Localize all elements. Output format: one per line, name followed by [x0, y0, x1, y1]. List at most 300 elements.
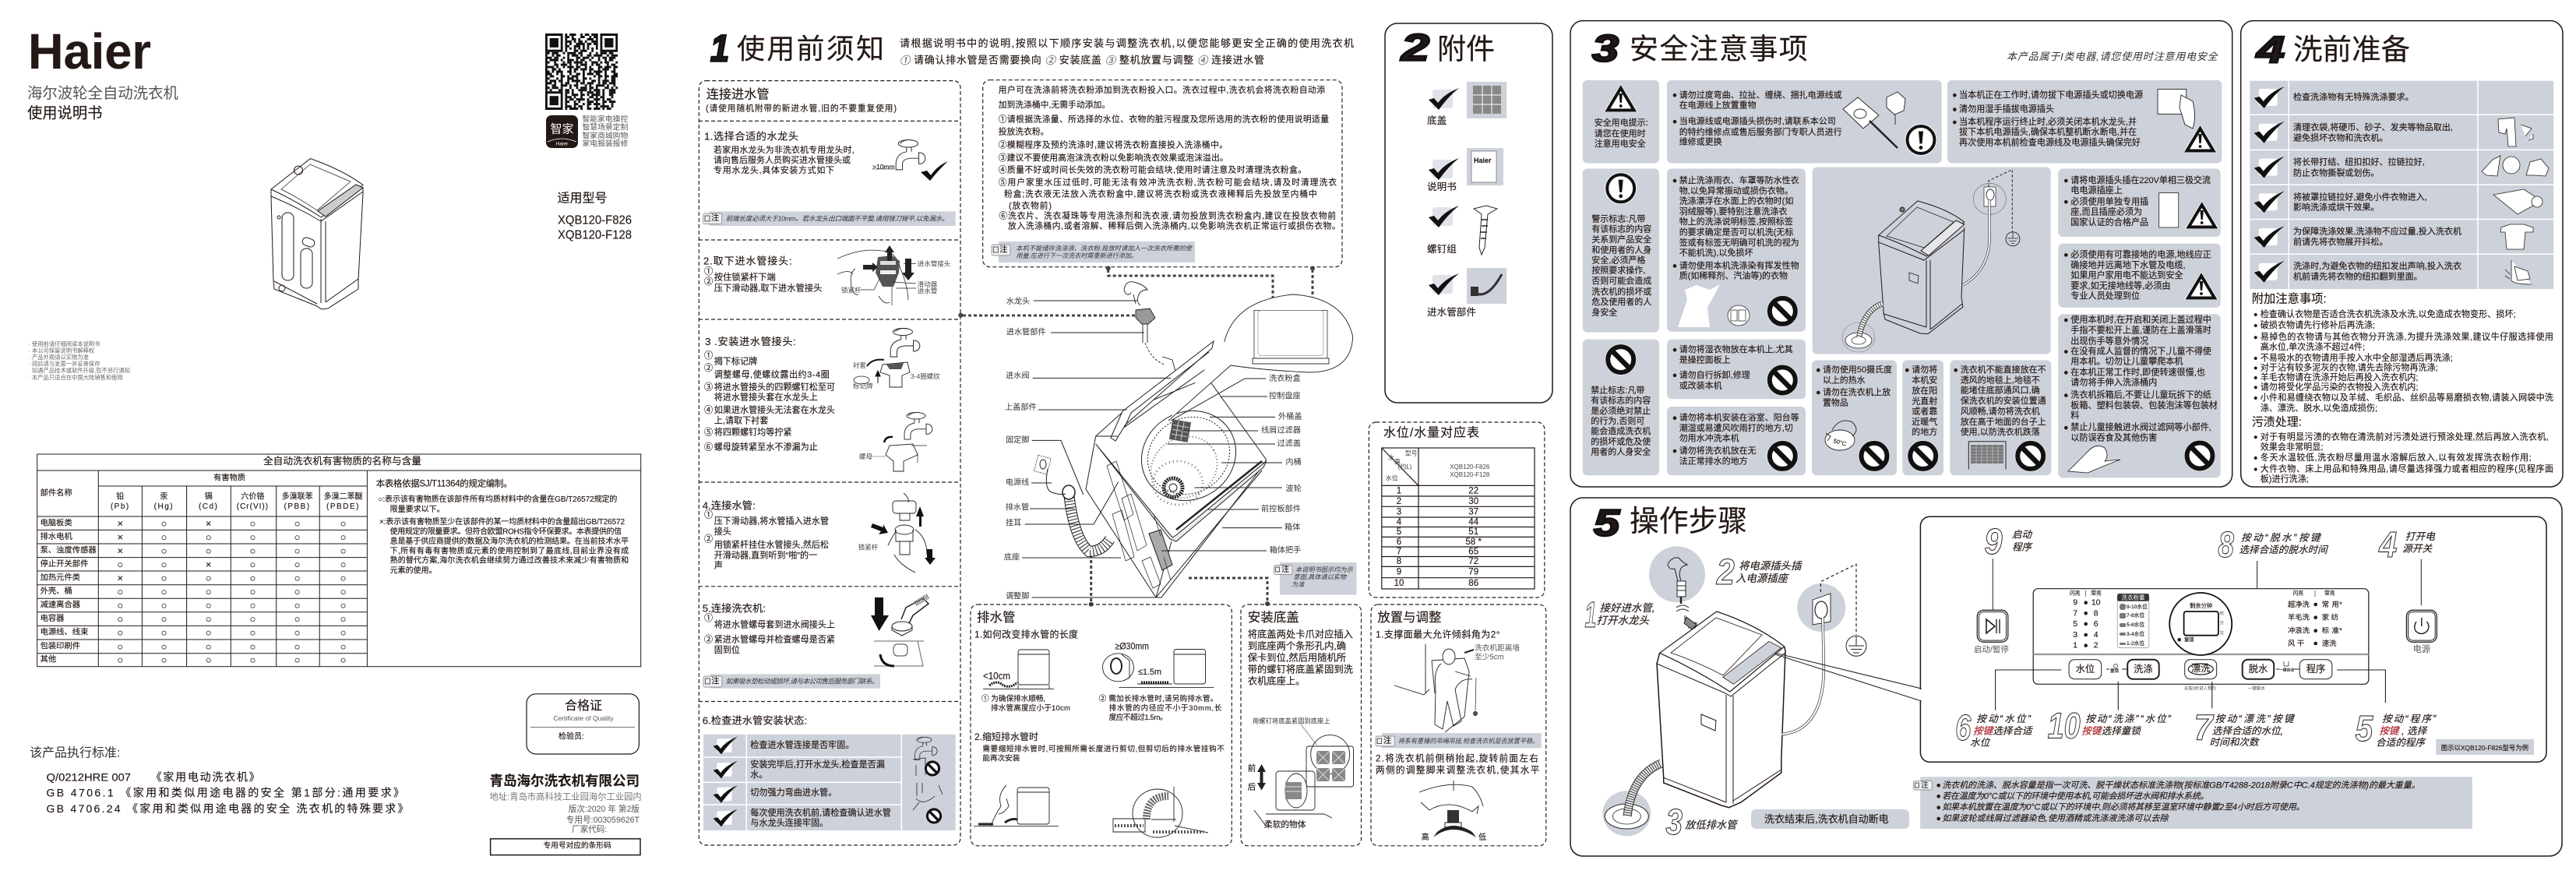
- part callouts: 波轮: [1285, 483, 1302, 494]
- heading: 连接进水管: [707, 87, 770, 101]
- hazardous substances table: ○: [294, 640, 301, 653]
- hazardous substances table: ○: [160, 654, 167, 665]
- QR code: [545, 33, 618, 110]
- card: socket requirements: 必须使用单独专用插: [2070, 196, 2148, 206]
- product standards: 《家用电动洗衣机》: [151, 771, 260, 784]
- additional notes: 小件和易缠绕衣物以及羊绒、毛织品、丝织品等易磨损衣物,请装入网袋中洗: [2261, 392, 2553, 403]
- app icon: [546, 115, 578, 148]
- text: hose shortening: 需要缩短排水管时,可按照所需长度进行剪切,但剪切后的排水管挂钩不: [982, 745, 1225, 754]
- checklist table: [703, 735, 956, 830]
- step 1 label: 接好进水管,: [1600, 602, 1654, 614]
- company info: 青岛海尔洗衣机有限公司: [489, 774, 640, 789]
- card: wet clothing: [1667, 340, 1806, 399]
- app icon: Haier: [556, 142, 569, 146]
- step 5 text: 固到位: [714, 644, 740, 655]
- step 5 label: 按动“程序”: [2382, 714, 2437, 724]
- hazardous substances table: ○: [249, 586, 255, 597]
- checklist text: 机前请先将衣物的纽扣翻到里面。: [2293, 270, 2423, 281]
- program indicators: [2288, 589, 2342, 647]
- card: power cord: [1667, 80, 1942, 164]
- hazardous substances table: (Cr(VI)): [237, 502, 269, 511]
- step 1 text: 请向售后服务人员购买进水管接头或: [714, 154, 851, 165]
- additional notes: 请勿将受化学品污染的衣物投入洗衣机内;: [2261, 381, 2418, 392]
- hazardous substances table: ○: [160, 600, 167, 611]
- app features: 智家商城购物: [583, 131, 628, 140]
- usage notes: · 如遇产品技术或软件升级,恕不另行通知: [28, 367, 130, 374]
- table values: [1394, 486, 1482, 588]
- text: hose extension: ② 需加长排水管时,请另购排水管。: [1099, 694, 1218, 703]
- additional notes: 涤、漂洗、脱水,以免造成损伤;: [2261, 403, 2377, 414]
- card: carpet ventilation: 透风的地毯上,地毯不: [1961, 374, 2040, 385]
- part callouts: 前控板部件: [1261, 503, 1301, 514]
- card: plug safety: 当本机程序运行终止时,必须关闭本机水龙头,并: [1959, 116, 2137, 127]
- icon: number 3: 3: [1592, 28, 1619, 70]
- card: carpet ventilation: 风顺畅,请勿将洗衣机: [1961, 406, 2040, 417]
- note: diagram: 注: [1281, 564, 1289, 574]
- note 1: 注: [711, 213, 719, 223]
- hazardous substances table: ○: [340, 600, 346, 611]
- card: sunlight: 或者靠: [1912, 406, 1937, 417]
- step 6 label: 6: [1955, 707, 1972, 748]
- hazardous substances table: 多溴联苯: [282, 491, 313, 501]
- company info: [489, 774, 642, 855]
- illustration: adjustable foot: [1419, 781, 1486, 842]
- usage notes: · 本产品只适合在中国大陆销售和使用: [28, 374, 123, 381]
- step 3 text: ④: [704, 406, 713, 415]
- illustration: tightening nut: [859, 412, 932, 471]
- checklist text: 切勿强力弯曲进水管。: [750, 787, 837, 798]
- model example tag: 图示以XQB120-F826型号为例: [2441, 744, 2528, 752]
- card: hot water: 置物品: [1823, 396, 1848, 407]
- card: child safety: 使用本机时,在开启和关闭上盖过程中: [2070, 314, 2211, 325]
- card: electrical safety hint: [1583, 80, 1659, 164]
- title: accessories: 附件: [1437, 33, 1495, 65]
- drain: [1842, 304, 1883, 352]
- panel: install base cover: 安装底盖: [1248, 610, 1299, 625]
- hazardous substances table: ○: [206, 586, 212, 597]
- control buttons: 水位: [2076, 663, 2095, 675]
- hazardous substances table: 镉: [205, 491, 213, 501]
- card: grounding: [2058, 244, 2221, 308]
- detergent text: 放入洗涤桶内,或者溶解、稀释后倒入洗涤桶内,以免影响洗衣机正常运行或损伤衣物。: [1008, 220, 1341, 231]
- hazardous substances table: 加热元件类: [41, 572, 80, 583]
- card: installation location: [1667, 407, 1806, 475]
- card: plug safety: 当本机正在工作时,请勿拔下电源插头或切换电源: [1959, 89, 2143, 100]
- hazardous substances table: ○: [340, 613, 346, 625]
- step 2 text: ②: [704, 277, 713, 287]
- table header: 水位: [1386, 474, 1398, 481]
- card: child safety: 出现伤手等意外情况: [2070, 335, 2148, 346]
- app icon: 智家: [550, 122, 573, 136]
- stain treatment: 效果会非常明显;: [2261, 441, 2323, 452]
- table values: 86: [1468, 579, 1478, 588]
- program indicators: 常亮: [2324, 589, 2335, 597]
- checklist text: [2293, 91, 2461, 281]
- hazardous substances table: ○: [294, 572, 301, 584]
- step 1 label: 1: [1584, 594, 1597, 635]
- card: plug safety: 拔下本机电源插头,确保本机整机断水断电,并在: [1959, 126, 2137, 137]
- text: hose shortening: 能再次安装: [982, 754, 1020, 763]
- hazardous substances table: 本表格依据SJ/T11364的规定编制。: [376, 478, 513, 489]
- applicable models: XQB120-F128: [558, 229, 632, 241]
- text: hose height: [981, 694, 1070, 713]
- hazardous substances table: ○: [206, 640, 212, 653]
- hazardous substances table: ○: [160, 626, 167, 639]
- water level indicators: 3: [2073, 630, 2077, 640]
- hazardous substances table: 息是基于供应商提供的数据及海尔洗衣机的检测结果。在当前技术水平: [390, 536, 629, 546]
- part callouts: 挂耳: [1006, 517, 1021, 528]
- section 3: safety precautions: [1570, 21, 2232, 487]
- card: wet clothing: 或改装本机: [1679, 380, 1722, 391]
- panel: control panel steps: [1920, 516, 2546, 762]
- step 3 text: ①: [704, 351, 713, 361]
- control buttons: 长按3秒进入预约: [2184, 685, 2216, 691]
- table header: 量: [1394, 458, 1401, 466]
- step 7 label: [2194, 707, 2296, 748]
- stain treatment: 冬天水温较低,洗衣粉尽量用温水溶解后放入,以有效发挥洗衣粉作用;: [2261, 452, 2532, 463]
- hazardous substances table: 汞: [160, 492, 167, 501]
- table header: 水: [1388, 453, 1394, 461]
- checklist text: 前请先将衣物展开抖松。: [2293, 236, 2388, 247]
- levelling text: 两侧的调整脚来调整洗衣机,使其水平: [1376, 765, 1540, 776]
- program indicators: 速洗: [2322, 639, 2337, 647]
- app features: 家电报装报修: [583, 139, 628, 148]
- step 3 text: 上,请取下衬套: [714, 415, 768, 425]
- step 8 label: [2218, 524, 2328, 652]
- step 4 text: ①: [704, 509, 713, 520]
- heading: (请使用随机附带的新进水管,旧的不要重复使用): [706, 103, 897, 113]
- card: child safety: [2058, 314, 2221, 478]
- labels: connector parts: 锁紧杆: [841, 287, 862, 294]
- hazardous substances table: ○: [206, 654, 212, 665]
- product standards: 该产品执行标准:: [30, 745, 120, 759]
- detergent text: 加到洗涤桶中,无需手动添加。: [999, 99, 1110, 110]
- panel: water level table: 水位/水量对应表: [1383, 425, 1479, 439]
- panel: water level table: [1369, 422, 1545, 597]
- step 4 text: [703, 499, 829, 570]
- company info: 版次:2020 年 第2版: [569, 804, 640, 814]
- checklist text: 防止衣物撕裂或划伤。: [2293, 167, 2379, 178]
- illustration: base cover: 柔软的物体: [1264, 819, 1306, 830]
- table values: 79: [1468, 567, 1478, 576]
- hazardous substances table: (Pb): [111, 502, 130, 511]
- panel: drain hose: <10cm: [983, 670, 1010, 682]
- hazardous substances table: ○: [117, 626, 123, 639]
- additional notes: 破损衣物请先行修补后再洗涤;: [2261, 319, 2375, 330]
- card: sunlight: 请勿将: [1912, 365, 1937, 375]
- table values: 72: [1468, 557, 1478, 566]
- levelling text: [1376, 752, 1540, 776]
- app features: 智慧场景定制: [583, 122, 628, 132]
- detergent text: 粉盒;洗衣液无法放入洗衣粉盒中,建议将洗衣粉或洗衣液稀释后先投放至内桶中: [1004, 189, 1317, 199]
- step 2 text: [703, 256, 822, 293]
- step 5 text: 紧进水管螺母并检查螺母是否紧: [714, 634, 835, 645]
- stain treatment: 污渍处理:: [2252, 416, 2302, 428]
- checklist text: 水。: [750, 770, 768, 780]
- text: hose height: ① 为确保排水顺畅,: [981, 694, 1045, 703]
- hazardous substances table: ○:表示该有害物质在该部件所有均质材料中的含量在GB/T26572规定的: [378, 494, 617, 504]
- step 3 text: 如果进水管接头无法套在水龙头: [714, 404, 835, 415]
- text: hose height: 排水管高度应小于10cm: [991, 703, 1070, 713]
- step 5 label: 合适的程序: [2376, 737, 2426, 748]
- hazardous substances table: 下,所有有毒有害物质或元素的使用控制到了最底线,目前业界没有成: [390, 545, 629, 556]
- card: warning symbol: 关系到产品安全: [1591, 234, 1651, 245]
- panel: inlet hose connection: [699, 81, 960, 845]
- detergent amount legend: 7-8水位: [2127, 611, 2144, 618]
- hazardous substances table: ○: [160, 559, 167, 570]
- note: capacity and temperature: 洗衣机的洗涤、脱水容量是指一次可洗、脱干燥状态标准洗涤物(按标准GB/T4288-2018附录C中C.4规定的洗涤物)的最大重量。: [1942, 780, 2420, 790]
- note 5: [703, 674, 880, 689]
- hazardous substances table: 外壳、桶: [41, 586, 72, 596]
- plug lens with ground: [1781, 564, 1866, 735]
- card: child safety: 禁止儿童接触进水阀过滤网等小部件,: [2070, 421, 2211, 432]
- hazardous substances table: ○: [160, 586, 167, 597]
- check marks: [714, 737, 738, 826]
- table values: 65: [1468, 547, 1478, 556]
- base cover text: 到底座两个条形孔内,确: [1248, 640, 1346, 651]
- auto power-off message: 洗衣结束后,洗衣机自动断电: [1764, 813, 1889, 825]
- checklist text: 安装完毕后,打开水龙头,检查是否漏: [750, 759, 885, 770]
- step 4 text: 压下滑动器,将水管插入进水管: [714, 515, 829, 526]
- card: child safety: 板箱、塑料包装袋、包装泡沫等包装材: [2070, 400, 2218, 411]
- table values: 3: [1397, 508, 1401, 517]
- hazardous substances table: ○: [294, 654, 301, 665]
- additional notes: 对于沾有较多泥灰的衣物,请先去除污物再洗涤;: [2261, 361, 2438, 372]
- card: warning symbol: 有该标志的内容: [1591, 224, 1651, 234]
- panel: positioning and adjustment: 洗衣机距离墙: [1475, 643, 1520, 653]
- water level indicators: 7: [2073, 608, 2077, 618]
- step 2 label: 入电源插座: [1736, 573, 1790, 584]
- button: power: [2406, 610, 2437, 654]
- checklist text: 洗涤时,为避免衣物的纽扣发出声响,投入洗衣: [2293, 260, 2461, 271]
- auto power-off message: [1751, 809, 1909, 829]
- note: diagram: 本说明书图示均为示: [1295, 566, 1354, 573]
- illustration: fitting connector: [853, 329, 940, 390]
- hazardous substances table: ×: [206, 517, 211, 530]
- table values: 6: [1397, 537, 1401, 547]
- icon: number 4: 4: [2256, 30, 2285, 72]
- illustration: adjustable foot: 低: [1478, 832, 1486, 842]
- part callouts: 控制盘座: [1269, 391, 1301, 400]
- card: wet clothing: 请勿将湿衣物放在本机上,尤其: [1679, 344, 1793, 354]
- table values: 7: [1397, 547, 1401, 556]
- part callouts: 内桶: [1285, 456, 1302, 467]
- hazardous substances table: 其他: [41, 654, 56, 664]
- hazardous substances table: 电脑板类: [41, 517, 72, 528]
- table values: 8: [1397, 557, 1401, 566]
- card: warning symbol: 危及使用者的人: [1591, 296, 1651, 307]
- card: plug safety: 清勿用湿手插拔电源插头: [1959, 104, 2054, 115]
- hazardous substances table: ○: [160, 531, 167, 543]
- water level indicators: [2070, 589, 2102, 650]
- step 5 text: [703, 601, 835, 655]
- detergent text: 用户可在洗涤前将洗衣粉添加到洗衣粉投入口。洗衣过程中,洗衣机会将洗衣粉自动添: [999, 84, 1325, 95]
- card: warning symbol: 按照要求操作,: [1591, 265, 1645, 276]
- step 1 text: 若家用水龙头为非洗衣机专用龙头时,: [714, 144, 855, 155]
- checklist text: 为保障洗涤效果,洗涤物不应过量,投入洗衣机: [2293, 225, 2461, 236]
- hazardous substances table: ○: [249, 600, 255, 611]
- hazardous substances table: ○: [294, 626, 301, 639]
- table values: 22: [1468, 486, 1478, 495]
- power cable and ground: [1963, 170, 2020, 285]
- preparation checklist: [2250, 81, 2553, 289]
- table values: 4: [1397, 517, 1402, 527]
- hazardous substances table: ○: [206, 600, 212, 611]
- card: child safety: 在本机正常工作时,即使转速很慢,也: [2070, 366, 2205, 377]
- illustration: connecting to machine: [871, 596, 929, 666]
- water level indicators: 8: [2094, 608, 2099, 618]
- labels: connector parts: 进水管: [918, 287, 937, 295]
- part callouts: 过滤盖: [1277, 438, 1301, 449]
- heading: [706, 87, 897, 113]
- stain treatment: 大件衣物、床上用品和特殊用品,请尽量选择强力或者相应的程序(见程序面: [2261, 463, 2553, 474]
- card: hot water: 以上的热水: [1823, 374, 1866, 385]
- hazardous substances table: ○: [160, 517, 167, 530]
- card: sunlight: 光直射: [1912, 395, 1937, 406]
- accessory: manual: [1427, 148, 1503, 192]
- table header: XQB120-F826: [1450, 463, 1490, 470]
- additional notes: 不易吸水的衣物请用手按入水中全部湿透后再洗涤;: [2261, 352, 2453, 363]
- card: child safety: 料: [2070, 410, 2079, 421]
- card: installation location: 法正常排水的地方: [1679, 455, 1748, 466]
- card: waterproof clothing: [1667, 168, 1806, 332]
- card: carpet ventilation: 洗衣机不能直接放在不: [1961, 364, 2046, 375]
- illustration: base cover: 后: [1248, 782, 1256, 791]
- hazardous substances table: ○: [206, 545, 212, 556]
- button: start pause: 启动/暂停: [1974, 644, 2009, 654]
- card: grounding: 确接地并远离地下水管及电缆,: [2070, 259, 2186, 270]
- title: safety: 安全注意事项: [1630, 33, 1808, 65]
- card: waterproof clothing: 禁止洗涤雨衣、车罩等防水性衣: [1679, 174, 1799, 185]
- hazardous substances table: ○: [294, 559, 301, 570]
- card: warning symbol: 身安全: [1591, 306, 1617, 317]
- hazardous substances table: 减速离合器: [41, 600, 80, 609]
- card: waterproof clothing: 的要求确定是否可以机洗(无标: [1679, 227, 1793, 238]
- model example tag: [2436, 739, 2534, 755]
- part callouts: 箱体: [1284, 522, 1300, 532]
- lens: detergent drawer: [1168, 294, 1353, 421]
- step 2 text: 压下滑动器,取下进水管接头: [714, 282, 822, 293]
- icon: number 5: 5: [1594, 503, 1621, 544]
- step 4 text: 4.连接水管:: [703, 499, 756, 511]
- step 3 text: 调整螺母,使螺纹露出约3-4圈: [714, 368, 830, 379]
- additional notes: 高水位,单次洗涤不超过4件;: [2261, 341, 2365, 352]
- card: plug safety: [1947, 80, 2222, 164]
- checklist text: 清理衣袋,将硬币、砂子、发夹等物品取出,: [2293, 122, 2453, 132]
- tap lens with step 1: [1649, 546, 1705, 629]
- additional notes: [2252, 291, 2553, 414]
- step 6 label: [1955, 707, 2033, 748]
- usage notes: · 阅后请与发票一并妥善保存: [28, 360, 100, 368]
- accessory: manual: 说明书: [1427, 181, 1457, 192]
- illustration: machine parts diagram: [1004, 282, 1357, 601]
- step 4 text: 声: [714, 559, 723, 570]
- hazardous substances table: 排水电机: [41, 531, 72, 541]
- text: hose extension: [1099, 694, 1222, 722]
- panel: detergent instructions: [983, 80, 1342, 267]
- illustration: connecting hose: [858, 493, 936, 573]
- illustration: cutting hose: [974, 785, 1059, 826]
- program indicators: 风 干: [2288, 640, 2304, 647]
- usage notes: · 本公司保留说明书解释权: [28, 347, 95, 354]
- step 9 label: 9: [1985, 521, 2003, 562]
- usage notes: [28, 340, 130, 381]
- card: prohibited symbol: 的损坏或危及使: [1591, 436, 1651, 447]
- hazardous substances table: 有害物质: [213, 472, 245, 482]
- hazardous substances table: ×: [118, 531, 123, 543]
- card: waterproof clothing: 物上的洗涤说明标签,按照标签: [1679, 216, 1793, 227]
- step 5 label: 按键 , 选择: [2379, 725, 2428, 736]
- card: installation location: 勿用水冲洗本机: [1679, 432, 1739, 443]
- product standards: GB 4706.24 《家用和类似用途电器的安全 洗衣机的特殊要求》: [47, 802, 408, 815]
- card: waterproof clothing: 签或有标签无明确可机洗的视为: [1679, 237, 1799, 248]
- step 5 text: ①: [704, 613, 713, 623]
- additional notes: 附加注意事项:: [2252, 291, 2327, 305]
- water level indicators: 常亮: [2091, 589, 2102, 597]
- hazardous substances table: ○: [294, 545, 301, 556]
- app features: [583, 114, 628, 148]
- app features: 智能家电操控: [583, 114, 628, 124]
- detergent text: ⑤用户家里水压过低时,可能无法有效冲洗洗衣粉,洗衣粉可能会结块,请及时清理洗衣: [999, 176, 1337, 187]
- labels: connector parts: [841, 260, 951, 295]
- note: capacity and temperature: 如果波轮或线屑过滤器染色,使用酒精或洗涤液洗涤可以去除: [1942, 813, 2170, 823]
- certificate of quality: 检验员:: [559, 731, 584, 742]
- checklist text: 影响洗涤或烘干效果。: [2293, 201, 2379, 212]
- control buttons: [2069, 660, 2332, 691]
- step 6 label: 水位: [1970, 737, 1991, 748]
- card: waterproof clothing: 请勿使用本机洗涤染有挥发性物: [1679, 259, 1799, 270]
- card: carpet ventilation: 使用,以防洗衣机跌落: [1961, 426, 2040, 437]
- card: warning symbol: 和使用者的人身: [1591, 245, 1651, 256]
- machine body: [1086, 341, 1267, 597]
- card: sunlight: 近暖气: [1912, 416, 1937, 427]
- accessory: base cover: 底盖: [1427, 115, 1447, 126]
- card: warning symbol: [1583, 168, 1659, 333]
- panel: install base cover: 用螺钉将底盖紧固到底座上: [1253, 717, 1330, 725]
- part callouts: 电源线: [1006, 477, 1029, 488]
- certificate of quality: 合格证: [565, 699, 602, 713]
- accessory: base cover: [1427, 82, 1506, 126]
- step 4 label: [2378, 524, 2436, 605]
- card: wet clothing: 请勿自行拆卸,修理: [1679, 369, 1750, 380]
- card: grounding: 必须使用有可靠接地的电源,地线应正: [2070, 248, 2211, 259]
- card: prohibited symbol: 的行为,否则可: [1591, 415, 1644, 426]
- hazardous substances table: 全自动洗衣机有害物质的名称与含量: [263, 455, 421, 467]
- card: socket requirements: 请将电源插头插在220V单相三极交流: [2070, 174, 2211, 185]
- step 5 text: 5.连接洗衣机:: [703, 601, 766, 614]
- hazardous substances table: ○: [249, 545, 255, 556]
- table values: 51: [1468, 527, 1478, 537]
- panel: drain hose: ≤1.5m: [1138, 668, 1161, 677]
- note: levelling: 注: [1383, 735, 1391, 745]
- control buttons: 程序: [2306, 663, 2325, 675]
- timer display: 时: [2219, 610, 2224, 616]
- hazardous substances table: 部件名称: [41, 488, 72, 498]
- illustration: fitting connector: 标记牌: [853, 382, 873, 390]
- accessory: screws: [1427, 206, 1497, 255]
- hazardous substances table: (Cd): [199, 502, 218, 511]
- hazardous substances table: 停止开关部件: [41, 559, 88, 569]
- hazardous substances table: ○: [249, 517, 255, 530]
- note: detergent storage: 用量,在进行下一次洗衣时需重新进行添加。: [1016, 252, 1137, 259]
- water level indicators: 5: [2073, 619, 2077, 629]
- cover panel: [27, 23, 642, 855]
- hazardous substances table: 熟的替代方案,海尔洗衣机会继续努力通过改善技术来减少有害物质和: [390, 555, 629, 566]
- hazardous substances table: ○: [117, 613, 123, 625]
- note 5: 注: [711, 676, 719, 685]
- part callouts: 箱体把手: [1270, 545, 1301, 555]
- card: electrical safety hint: 安全用电提示:: [1595, 117, 1648, 128]
